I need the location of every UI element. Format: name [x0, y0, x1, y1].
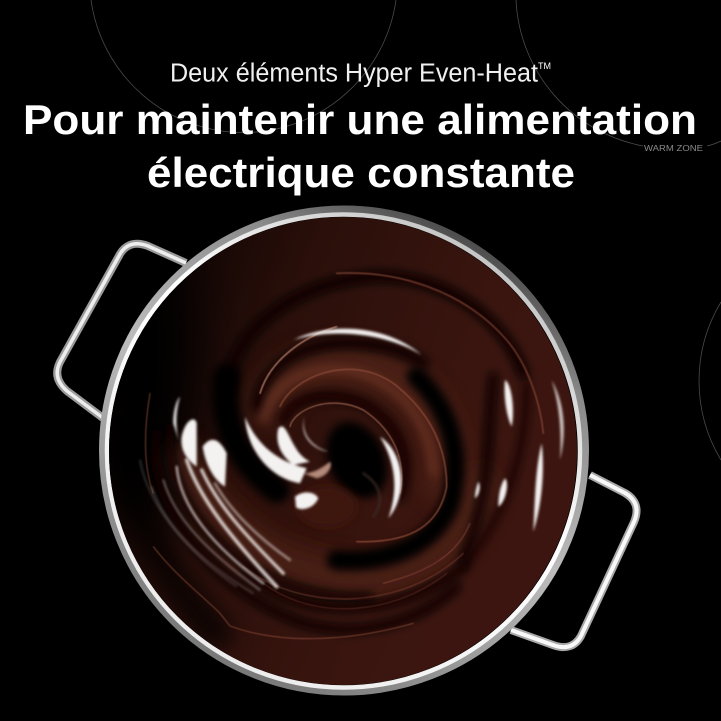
title line 1: Pour maintenir une alimentation: [23, 96, 697, 143]
light streaks lower left: [140, 460, 290, 593]
glossy white highlights: [173, 329, 564, 532]
title line 2: électrique constante: [147, 149, 575, 196]
pot handle: right: [511, 475, 637, 647]
melted chocolate swirl: [109, 217, 577, 685]
chocolate shading: [109, 262, 534, 652]
label: warm zone: WARM ZONE: [644, 143, 703, 153]
cooktop zone rings: [91, 0, 721, 460]
subtitle: Deux éléments Hyper Even-Heat: [170, 60, 538, 88]
pot rim: [103, 210, 585, 692]
reddish sheen lines: [145, 273, 543, 639]
pot handle: left: [57, 244, 186, 418]
trademark: TM: [538, 61, 551, 72]
